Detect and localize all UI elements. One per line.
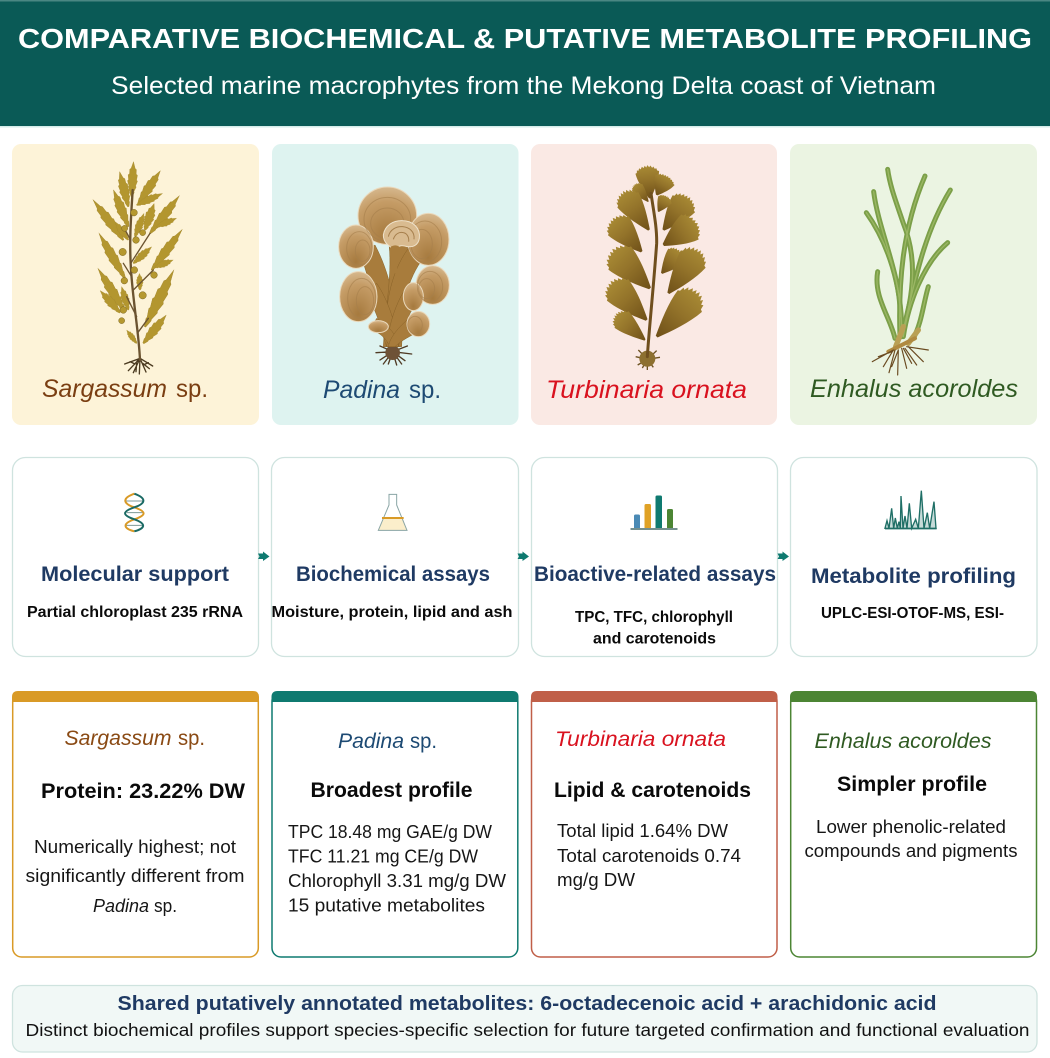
measurements: mg/g DW — [557, 870, 635, 890]
key finding: Lipid & carotenoids — [554, 779, 751, 802]
measurements: TFC 11.21 mg CE/g DW — [288, 846, 478, 866]
species name: Turbinaria ornata — [555, 728, 726, 751]
species name: sp. — [409, 376, 441, 404]
panel: Molecular support step — [12, 458, 258, 656]
step heading: Biochemical assays — [296, 563, 490, 586]
species name — [338, 730, 437, 753]
step detail: Moisture, protein, lipid and ash — [272, 604, 512, 621]
species name: Enhalus acoroldes — [814, 730, 992, 753]
species name: Sargassum — [42, 375, 167, 403]
key finding: Protein: 23.22% DW — [41, 780, 245, 803]
illustration: Padina — [339, 187, 449, 365]
species name: sp. — [410, 730, 437, 753]
icon: flask — [378, 494, 407, 530]
description — [804, 817, 1018, 861]
subtitle: Selected marine macrophytes from the Mekong Delta coast of Vietnam — [111, 72, 936, 100]
step detail: UPLC-ESI-OTOF-MS, ESI- — [821, 605, 1004, 622]
species name: sp. — [178, 727, 205, 750]
step heading: Metabolite profiling — [811, 565, 1016, 588]
panel: Turbinaria findings — [531, 691, 778, 957]
panel: Enhalus findings — [790, 691, 1037, 957]
measurements — [557, 821, 741, 890]
icon: DNA helix — [125, 494, 144, 531]
illustration: Turbinaria — [599, 164, 712, 370]
header banner — [0, 0, 1050, 128]
illustration: Enhalus — [866, 169, 950, 375]
step detail: TPC, TFC, chlorophyll — [575, 609, 733, 626]
species name: Turbinaria ornata — [546, 376, 747, 404]
key finding: Broadest profile — [310, 779, 472, 802]
species name: Padina — [338, 730, 404, 753]
key finding: Simpler profile — [837, 773, 987, 796]
species name: sp. — [176, 375, 208, 403]
conclusion: Distinct biochemical profiles support species-specific selection for future targeted confirmation and functional evaluation — [26, 1020, 1030, 1040]
measurements: Chlorophyll 3.31 mg/g DW — [288, 871, 506, 891]
description: Padina — [93, 896, 149, 916]
species name: Padina — [323, 376, 400, 404]
species name: Sargassum — [64, 727, 172, 750]
illustration: Sargassum — [89, 161, 186, 374]
arrow: step 2 to 3 — [518, 552, 529, 561]
description — [26, 837, 245, 916]
step heading: Molecular support — [41, 563, 229, 586]
step detail: Partial chloroplast 235 rRNA — [27, 604, 243, 621]
panel: Padina findings — [272, 691, 518, 957]
panel: Turbinaria species card — [531, 144, 777, 425]
step detail: and carotenoids — [593, 630, 716, 648]
step heading: Bioactive-related assays — [534, 563, 776, 586]
measurements: Total lipid 1.64% DW — [557, 821, 728, 841]
arrow: step 1 to 2 — [258, 552, 270, 561]
icon: mass spectrum — [885, 491, 937, 529]
measurements: TPC 18.48 mg GAE/g DW — [288, 822, 492, 842]
panel: Sargassum findings — [12, 691, 259, 957]
panel: Padina species card — [272, 144, 518, 425]
species name — [323, 376, 441, 404]
measurements — [288, 822, 506, 916]
title: COMPARATIVE BIOCHEMICAL & PUTATIVE METABOLITE PROFILING — [18, 23, 1032, 54]
measurements: Total carotenoids 0.74 — [557, 846, 741, 866]
species name: Enhalus acoroldes — [810, 375, 1018, 403]
panel: Sargassum species card — [12, 144, 259, 425]
icon: bar chart — [630, 496, 678, 530]
panel: Biochemical assays step — [272, 458, 518, 656]
description: significantly different from — [26, 866, 245, 886]
panel: Enhalus species card — [790, 144, 1037, 425]
description: compounds and pigments — [804, 841, 1018, 861]
description: Numerically highest; not — [34, 837, 236, 857]
arrow: step 3 to 4 — [778, 552, 789, 561]
panel: Bioactive-related assays step — [532, 458, 778, 656]
measurements: 15 putative metabolites — [288, 896, 485, 916]
step detail — [575, 609, 733, 648]
panel: Metabolite profiling step — [790, 458, 1037, 656]
description: sp. — [154, 896, 177, 916]
footer callout — [12, 986, 1037, 1052]
shared metabolites heading: Shared putatively annotated metabolites: 6-octadecenoic acid + arachidonic acid — [118, 992, 937, 1015]
description: Lower phenolic-related — [816, 817, 1006, 837]
